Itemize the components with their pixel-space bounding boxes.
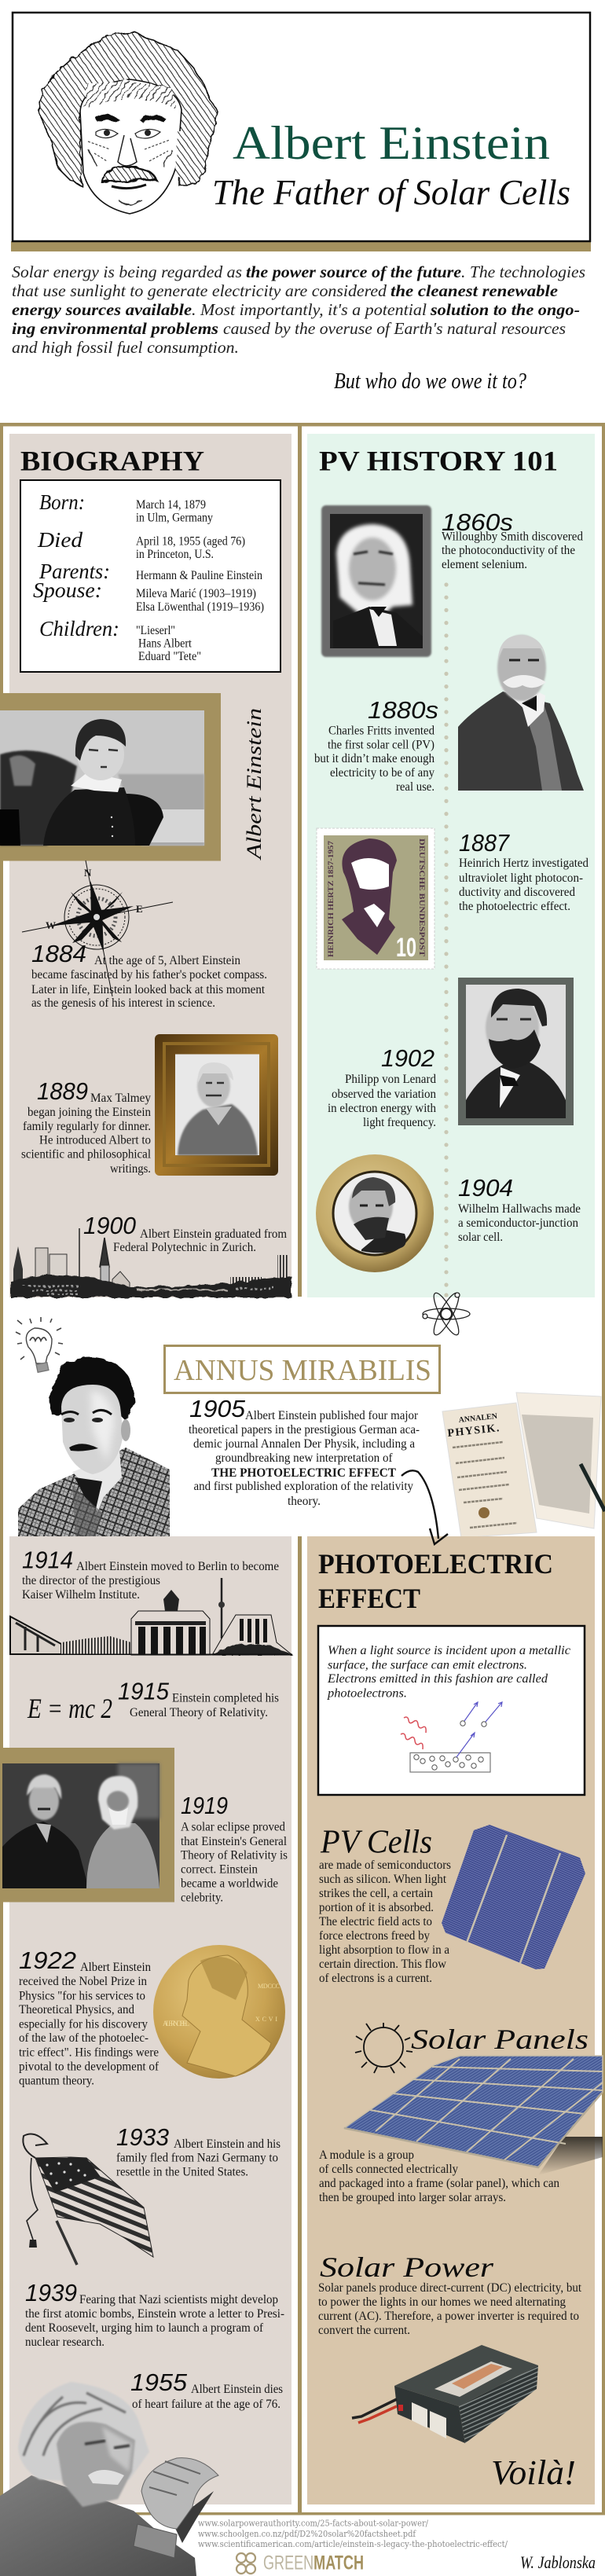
heading: photoelectric effect — [318, 1548, 553, 1614]
diagram: photoelectric emission — [401, 1702, 502, 1772]
event: 1902: 1902 — [381, 1044, 434, 1072]
text: solar power: Solar panels produce direct-current (DC) electricity, but — [318, 2281, 582, 2295]
facts box: Hermann & Pauline Einstein — [136, 569, 262, 582]
text: PV cells: of electrons is a current. — [319, 1972, 432, 1985]
event: 1884: Later in life, Einstein looked back at this moment — [31, 983, 266, 996]
event: 1914: 1914 — [22, 1547, 73, 1573]
event: 1919: became a worldwide — [181, 1877, 278, 1891]
event: 1904: a semiconductor-junction — [458, 1216, 578, 1230]
event: 1904 — [458, 1174, 581, 1244]
facts box: Hans Albert — [138, 637, 192, 651]
portrait: Philipp von Lenard — [458, 978, 574, 1125]
event: 1900: Albert Einstein graduated from — [140, 1227, 287, 1241]
text: PV cells — [319, 1859, 451, 1985]
facts box: in Ulm, Germany — [136, 511, 213, 525]
event: 1915 — [118, 1677, 279, 1719]
heading: photoelectric effect: EFFECT — [318, 1583, 420, 1614]
event: 1939 — [25, 2279, 284, 2349]
event: 1914: the director of the prestigious — [22, 1574, 160, 1587]
event: 1905 — [189, 1395, 420, 1508]
event: 1880s: 1880s — [368, 696, 438, 724]
event: 1939: nuclear research. — [25, 2336, 104, 2349]
illustration: Annalen der Physik pages — [442, 1393, 605, 1538]
event: 1904: solar cell. — [458, 1231, 503, 1244]
photo: older Einstein — [0, 2382, 218, 2576]
portrait: Heinrich Hertz stamp — [317, 828, 434, 969]
event: 1955: of heart failure at the age of 76. — [132, 2398, 280, 2411]
illustration: power inverter — [352, 2345, 538, 2443]
event: 1902: in electron energy with — [328, 1102, 436, 1115]
facts box: Died — [37, 528, 83, 552]
illustration: Annalen der Physik pages: PHYSIK. — [447, 1422, 500, 1440]
panel: biography continued — [0, 1536, 292, 2504]
event: 1900: Federal Polytechnic in Zurich. — [113, 1241, 256, 1254]
definition box: photoelectrons. — [327, 1686, 407, 1701]
sources — [198, 2518, 508, 2549]
event: 1905: THE PHOTOELECTRIC EFFECT — [211, 1466, 397, 1480]
event: 1884: At the age of 5, Albert Einstein — [94, 954, 240, 967]
event: 1880s: Charles Fritts invented — [328, 725, 434, 737]
event: 1889 — [21, 1077, 151, 1176]
event: 1902: Philipp von Lenard — [345, 1073, 436, 1086]
event: 1922: Albert Einstein — [80, 1961, 151, 1974]
icon: compass: N — [84, 867, 92, 879]
signature: Albert Einstein — [243, 708, 266, 861]
portrait: Heinrich Hertz stamp: 10 — [396, 933, 416, 963]
event: 1902: light frequency. — [363, 1116, 436, 1129]
event: 1889: He introduced Albert to — [39, 1133, 151, 1147]
event: 1939: dent Roosevelt, urging him to launch a program of — [25, 2321, 264, 2335]
event: 1922 — [19, 1947, 160, 2087]
title: Albert Einstein — [233, 117, 550, 169]
timeline dots — [444, 582, 449, 1297]
logo: GreenMatch: GREENMATCH — [263, 2552, 364, 2574]
event: 1884: 1884 — [31, 940, 86, 967]
text: PV cells: such as silicon. When light — [319, 1873, 447, 1886]
event: 1887 — [459, 829, 588, 913]
facts box: Elsa Löwenthal (1919–1936) — [136, 600, 264, 614]
text: solar panels: then be grouped into larger solar arrays. — [319, 2191, 506, 2204]
heading: solar panels: Solar Panels — [411, 2024, 588, 2055]
photo: young Einstein — [18, 1358, 170, 1536]
formula: E = mc2: E = mc 2 — [27, 1693, 112, 1724]
event: 1914 — [22, 1547, 279, 1602]
heading: PV cells: PV Cells — [320, 1825, 432, 1861]
event: 1955 — [130, 2369, 283, 2411]
event: 1900: 1900 — [83, 1212, 136, 1239]
definition box — [318, 1626, 585, 1795]
event: 1860s: element selenium. — [442, 558, 527, 571]
event: 1904: 1904 — [458, 1174, 513, 1202]
event: 1889: writings. — [110, 1162, 151, 1176]
panel: PV history — [307, 434, 595, 1297]
event: 1919: celebrity. — [181, 1891, 223, 1905]
event: 1919: 1919 — [181, 1792, 228, 1819]
intro paragraph: and high fossil fuel consumption. — [12, 338, 239, 357]
event: 1905: Albert Einstein published four major — [245, 1409, 419, 1422]
illustration: PV cell — [442, 1825, 585, 1969]
facts box: March 14, 1879 — [136, 498, 206, 512]
event: 1889: 1889 — [37, 1077, 88, 1105]
text: solar panels: of cells connected electrically — [319, 2163, 458, 2176]
event: 1933: 1933 — [116, 2123, 169, 2151]
event: 1922: Physics "for his services to — [19, 1990, 145, 2002]
sources: www.scientificamerican.com/article/einstein-s-legacy-the-photoelectric-effect/ — [198, 2539, 508, 2549]
event: 1889: scientific and philosophical — [21, 1147, 151, 1161]
event: 1914: Albert Einstein moved to Berlin to become — [76, 1560, 279, 1573]
definition box: surface, the surface can emit electrons. — [328, 1658, 527, 1672]
icon: light bulb — [16, 1317, 63, 1372]
event: 1905: theory. — [288, 1495, 321, 1508]
event: 1860s: 1860s — [442, 508, 513, 536]
event: 1887: 1887 — [459, 829, 511, 857]
intro paragraph: the power source of the future — [246, 262, 461, 281]
facts box: Eduard "Tete" — [138, 650, 201, 663]
text: solar power: convert the current. — [318, 2324, 410, 2337]
event: 1905: theoretical papers in the prestigious German aca- — [189, 1423, 420, 1437]
event: 1933 — [116, 2123, 280, 2178]
event: 1889: Max Talmey — [90, 1092, 151, 1105]
text: solar power: to power the lights in our homes we need alternating — [318, 2295, 566, 2309]
text: PV cells: portion of it is absorbed. — [319, 1901, 434, 1914]
intro paragraph: . The technologies — [461, 262, 585, 281]
intro paragraph — [12, 262, 585, 357]
event: 1860s: the photoconductivity of the — [442, 544, 575, 557]
sources: www.schoolgen.co.nz/pdf/D2%20solar%20factsheet.pdf — [198, 2529, 416, 2539]
icon: compass: E — [136, 903, 143, 915]
intro paragraph: energy sources available — [12, 300, 192, 319]
event: 1905: groundbreaking new interpretation of — [215, 1451, 393, 1465]
heading: biography: BIOGRAPHY — [20, 445, 204, 476]
event: 1860s — [442, 508, 583, 571]
icon: compass — [22, 861, 173, 996]
intro paragraph: the cleanest renewable — [390, 281, 558, 300]
event: 1900 — [83, 1212, 287, 1254]
event: 1922: of the law of the photoelec- — [19, 2031, 148, 2045]
facts box: Mileva Marić (1903–1919) — [136, 587, 256, 600]
event: 1905: 1905 — [189, 1395, 246, 1422]
intro paragraph: solution to the ongo- — [430, 300, 580, 319]
event: 1919: correct. Einstein — [181, 1862, 258, 1877]
illustration: Annalen der Physik pages: ANNALEN — [458, 1412, 498, 1425]
event: 1880s — [314, 696, 438, 794]
intro paragraph: ing environmental problems — [12, 319, 218, 338]
event: 1922: tric effect". His findings were — [19, 2046, 159, 2059]
event: 1939: 1939 — [25, 2279, 77, 2306]
event: 1922: especially for his discovery — [19, 2018, 148, 2031]
event: 1880s: the first solar cell (PV) — [328, 739, 434, 751]
photo: Max Talmey in gold frame — [155, 1034, 278, 1176]
photo: Einstein and Tagore — [0, 1748, 174, 1902]
event: 1922: pivotal to the development of — [19, 2060, 160, 2073]
event: 1933: resettle in the United States. — [116, 2166, 248, 2178]
illustration: Nobel medal: MDCCC — [258, 1983, 280, 1990]
text: solar power — [318, 2281, 582, 2337]
portrait: Heinrich Hertz stamp: HEINRICH HERTZ 1857-1957 — [327, 840, 335, 957]
intro paragraph: that use sunlight to generate electricity are considered — [12, 281, 387, 300]
subtitle: The Father of Solar Cells — [212, 172, 570, 212]
facts box: Children: — [39, 617, 119, 640]
event: 1887: ductivity and discovered — [459, 886, 575, 899]
definition box: Electrons emitted in this fashion are called — [327, 1672, 548, 1686]
intro paragraph: . Most importantly, it's a potential — [192, 300, 427, 319]
icon: atom — [423, 1290, 470, 1338]
text: PV cells: force electrons freed by — [319, 1929, 430, 1943]
voila: Voilà! — [491, 2453, 576, 2492]
illustration: American flag — [23, 2134, 153, 2265]
photo: young Albert — [0, 693, 221, 861]
event: 1919: Theory of Relativity is — [181, 1848, 288, 1862]
facts box — [20, 480, 280, 672]
heading box: Annus Mirabilis — [165, 1345, 440, 1393]
text: solar panels: and packaged into a frame (solar panel), which can — [319, 2177, 559, 2190]
event: 1919: A solar eclipse proved — [181, 1820, 285, 1834]
intro paragraph: Solar energy is being regarded as — [12, 262, 242, 281]
header panel — [11, 13, 591, 251]
portrait: Heinrich Hertz stamp: DEUTSCHE BUNDESPOST — [418, 838, 426, 956]
event: 1955: 1955 — [130, 2369, 188, 2396]
icon: Einstein head sketch — [39, 32, 218, 214]
icon: compass: W — [46, 919, 56, 931]
event: 1902: observed the variation — [332, 1088, 436, 1101]
event: 1889: began joining the Einstein — [28, 1106, 151, 1119]
event: 1887: ultraviolet light photocon- — [459, 872, 583, 885]
facts box: Born: — [39, 490, 85, 514]
illustration: Nobel medal — [153, 1945, 285, 2079]
event: 1915: 1915 — [118, 1677, 170, 1705]
event: 1880s: electricity to be of any — [330, 766, 434, 780]
definition box: When a light source is incident upon a metallic — [328, 1644, 570, 1657]
intro paragraph: caused by the overuse of Earth's natural resources — [223, 319, 566, 338]
event: 1914: Kaiser Wilhelm Institute. — [22, 1588, 140, 1602]
event: 1919 — [181, 1792, 288, 1905]
illustration: Nobel medal: XCVI — [255, 2016, 277, 2023]
event: 1915: Einstein completed his — [172, 1691, 279, 1705]
question: But who do we owe it to? — [334, 369, 526, 394]
arrow to photoelectric effect — [402, 1470, 448, 1544]
panel: biography — [0, 434, 292, 1297]
event: 1902 — [328, 1044, 436, 1129]
event: 1922: 1922 — [19, 1947, 76, 1974]
event: 1922: Theoretical Physics, and — [19, 2003, 134, 2016]
illustration: solar panel array — [344, 2056, 603, 2175]
event: 1919: that Einstein's General — [181, 1835, 287, 1848]
portrait: Charles Fritts — [458, 635, 584, 791]
heading box: Annus Mirabilis: ANNUS MIRABILIS — [174, 1354, 431, 1387]
text: PV cells: light absorption to flow in a — [319, 1943, 449, 1957]
illustration: Nobel medal: ALFR. NOBEL — [163, 2020, 189, 2027]
heading: solar power: Solar Power — [320, 2251, 494, 2283]
logo: GreenMatch — [236, 2552, 364, 2574]
event: 1887: the photoelectric effect. — [459, 900, 570, 913]
event: 1889: family regularly for dinner. — [23, 1120, 151, 1133]
text: PV cells: certain direction. This flow — [319, 1958, 447, 1971]
text: solar panels: A module is a group — [319, 2149, 414, 2162]
event: 1860s: Willoughby Smith discovered — [442, 530, 583, 544]
event: 1884: became fascinated by his father's pocket compass. — [31, 968, 267, 982]
panel: photoelectric effect — [307, 1536, 603, 2504]
text: solar power: current (AC). Therefore, a power inverter is required to — [318, 2310, 579, 2323]
facts box: Parents: — [38, 560, 110, 583]
event: 1933: Albert Einstein and his — [174, 2137, 280, 2151]
text: solar panels — [319, 2149, 559, 2204]
text: PV cells: The electric field acts to — [319, 1915, 432, 1928]
facts box: April 18, 1955 (aged 76) — [136, 534, 245, 549]
event: 1880s: real use. — [396, 780, 434, 794]
event: 1904: Wilhelm Hallwachs made — [458, 1202, 581, 1216]
heading: PV history: PV HISTORY 101 — [319, 445, 558, 476]
facts box: in Princeton, U.S. — [136, 548, 214, 561]
event: 1939: the first atomic bombs, Einstein wrote a letter to Presi- — [25, 2307, 284, 2321]
illustration: Berlin skyline — [10, 1578, 292, 1655]
text: PV cells: are made of semiconductors — [319, 1859, 451, 1872]
heading: photoelectric effect: PHOTOELECTRIC — [318, 1548, 553, 1580]
event: 1905: and first published exploration of the relativity — [193, 1480, 413, 1493]
event: 1922: quantum theory. — [19, 2075, 94, 2087]
illustration: Zurich skyline — [10, 1228, 292, 1297]
icon: sun — [355, 2023, 412, 2073]
text: PV cells: strikes the cell, a certain — [319, 1887, 433, 1900]
sources: www.solarpowerauthority.com/25-facts-about-solar-power/ — [198, 2518, 428, 2529]
event: 1884: as the genesis of his interest in science. — [31, 996, 215, 1010]
event: 1887: Heinrich Hertz investigated — [459, 857, 588, 870]
event: 1939: Fearing that Nazi scientists might develop — [79, 2293, 278, 2306]
event: 1905: demic journal Annalen Der Physik, including a — [193, 1437, 415, 1451]
event: 1915: General Theory of Relativity. — [130, 1706, 268, 1719]
portrait: Willoughby Smith — [321, 505, 431, 657]
facts box: "Lieserl" — [136, 624, 175, 637]
portrait: Wilhelm Hallwachs in round frame — [316, 1154, 434, 1272]
event: 1884 — [31, 940, 267, 1010]
event: 1922: received the Nobel Prize in — [19, 1975, 147, 1988]
event: 1880s: but it didn’t make enough — [314, 752, 434, 765]
event: 1955: Albert Einstein dies — [191, 2383, 283, 2396]
facts box: Spouse: — [33, 578, 102, 602]
event: 1933: family fled from Nazi Germany to — [116, 2152, 278, 2164]
